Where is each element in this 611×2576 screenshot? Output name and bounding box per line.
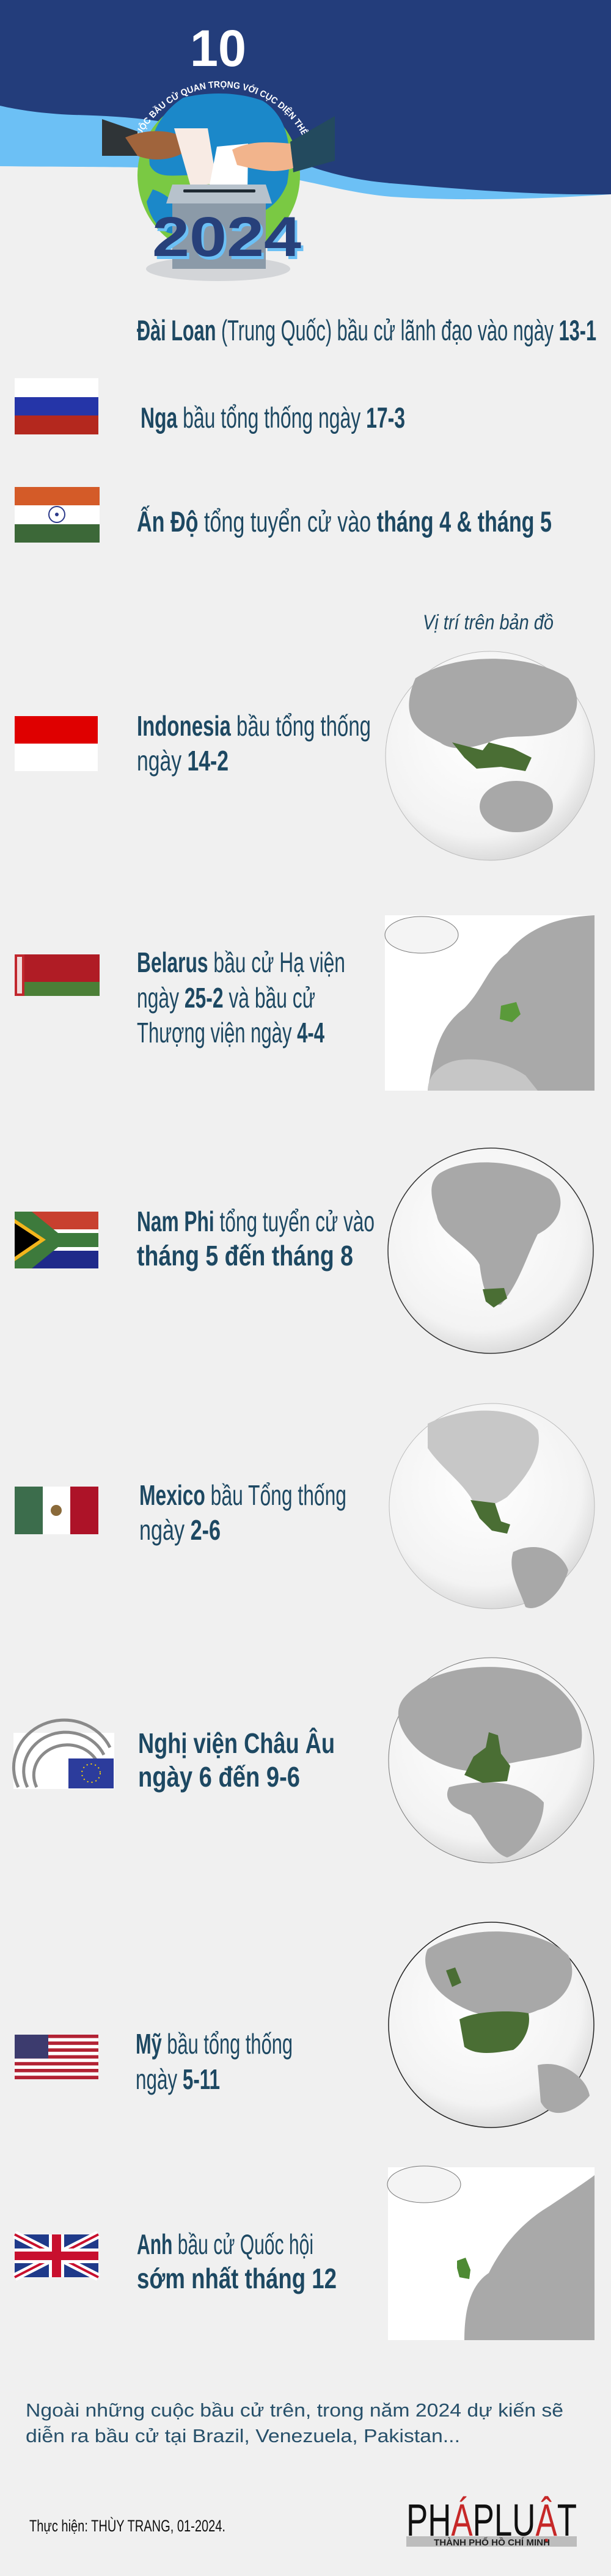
row: UK text: sớm nhất tháng 12 — [137, 2263, 337, 2294]
ballot box — [146, 257, 290, 281]
row: UK text: Anh bầu cử Quốc hội — [137, 2228, 313, 2260]
flag: Indonesia — [15, 716, 98, 771]
header banner — [0, 0, 611, 199]
row: Indonesia text — [137, 710, 371, 777]
flag: Belarus — [15, 954, 100, 996]
flag: Russia — [15, 378, 98, 434]
row: EU text: Nghị viện Châu Âu — [138, 1727, 335, 1759]
row: Mexico text — [139, 1479, 346, 1546]
map: Belarus — [385, 915, 595, 1091]
closing note: diễn ra bầu cử tại Brazil, Venezuela, Pakistan... — [26, 2425, 460, 2446]
right hand — [290, 116, 335, 172]
credit: Thực hiện: THÙY TRANG, 01-2024. — [29, 2516, 225, 2535]
globe: Indonesia — [386, 651, 595, 860]
flag: USA — [15, 2035, 98, 2079]
row: South Africa text: Nam Phi tổng tuyển cử vào — [137, 1206, 375, 1237]
row: USA text: ngày 5-11 — [136, 2063, 220, 2095]
globe: USA — [389, 1922, 594, 2128]
row: Mexico text: ngày 2-6 — [139, 1514, 221, 1546]
globe: European Union — [389, 1658, 594, 1863]
flag: European Parliament — [13, 1720, 114, 1789]
2024: 2024 — [155, 209, 304, 271]
illustration: globe with ballot box: 2024 — [152, 206, 301, 268]
row: South Africa text: tháng 5 đến tháng 8 — [137, 1240, 353, 1272]
globe: South Africa — [388, 1148, 593, 1353]
flag: Mexico — [15, 1487, 98, 1534]
row: Mexico text: Mexico bầu Tổng thống — [139, 1479, 346, 1511]
closing note: Ngoài những cuộc bầu cử trên, trong năm 2024 dự kiến sẽ — [26, 2399, 563, 2421]
title number 10: 10 — [190, 20, 246, 77]
row: USA text: Mỹ bầu tổng thống — [136, 2028, 293, 2060]
row: Belarus text: Belarus bầu cử Hạ viện — [137, 946, 345, 978]
closing note — [26, 2399, 563, 2446]
left hand — [102, 119, 139, 156]
row: Russia text: Nga bầu tổng thống ngày 17-3 — [141, 401, 405, 434]
row: South Africa text — [137, 1206, 375, 1272]
row: Belarus text: ngày 25-2 và bầu cử — [137, 982, 315, 1014]
row: Indonesia text: ngày 14-2 — [137, 745, 229, 777]
illustration: globe with ballot box — [102, 81, 335, 281]
flag: United Kingdom — [15, 2234, 98, 2277]
flag: South Africa — [15, 1212, 98, 1268]
map: United Kingdom — [387, 2166, 595, 2340]
map column heading: Vị trí trên bản đồ — [423, 611, 554, 634]
flag: India — [15, 487, 100, 543]
globe: Mexico — [389, 1403, 595, 1609]
row: Indonesia text: Indonesia bầu tổng thống — [137, 710, 371, 742]
row: EU text: ngày 6 đến 9-6 — [138, 1761, 300, 1793]
arc subtitle — [138, 87, 306, 142]
row: India text: Ấn Độ tổng tuyển cử vào tháng 4 & tháng 5 — [137, 505, 552, 538]
logo: Phap Luat: THÀNH PHỐ HỒ CHÍ MINH — [434, 2537, 550, 2548]
row: Belarus text — [137, 946, 345, 1048]
row: USA text — [136, 2028, 293, 2095]
row: EU text — [138, 1727, 335, 1793]
logo: Phap Luat: PHÁPLUẬT — [406, 2495, 577, 2545]
row: UK text — [137, 2228, 337, 2294]
row: Belarus text: Thượng viện ngày 4-4 — [137, 1017, 324, 1048]
